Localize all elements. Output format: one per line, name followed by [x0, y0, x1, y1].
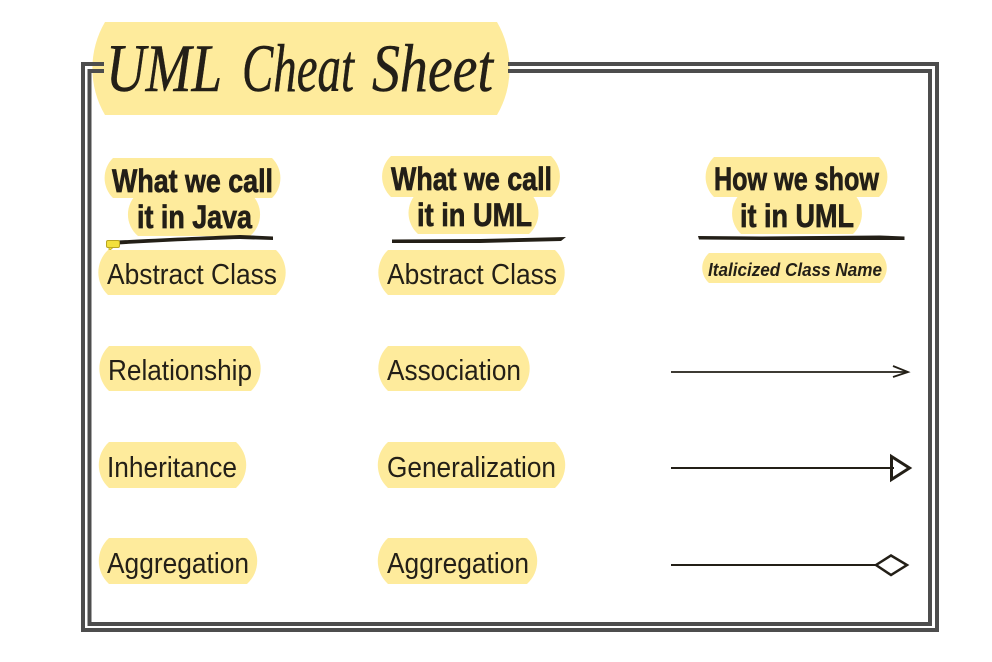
column heading: What we call it in UML: it in UML [417, 197, 532, 233]
icon: comment marker [106, 240, 120, 251]
column heading: How we show it in UML [706, 157, 887, 234]
title pill background [92, 22, 510, 115]
column heading: What we call it in Java: What we call [112, 163, 273, 199]
column heading: What we call it in UML: What we call [391, 161, 552, 197]
row 4 java: Aggregation: Aggregation [107, 548, 249, 580]
row 1 uml: Abstract Class: Abstract Class [387, 259, 557, 291]
row 3 java: Inheritance [99, 442, 246, 488]
column heading: What we call it in Java [105, 158, 280, 236]
title: Sheet [372, 30, 495, 106]
title: Cheat [242, 30, 355, 106]
row 3 uml: Generalization: Generalization [387, 452, 556, 484]
row 4 java: Aggregation [99, 538, 257, 584]
row 2 java: Relationship: Relationship [108, 355, 252, 387]
row 1 notation: Italicized Class Name [702, 253, 887, 283]
arrow: association [671, 366, 908, 377]
double frame [83, 64, 937, 630]
column heading: What we call it in Java: it in Java [137, 199, 252, 235]
row 1 java: Abstract Class [98, 250, 286, 295]
arrow: generalization [671, 456, 910, 480]
row 4 uml: Aggregation [378, 538, 537, 584]
row 2 uml: Association [378, 346, 530, 391]
underline: Java column [108, 235, 273, 245]
row 2 java: Relationship [99, 346, 261, 391]
arrow: aggregation [671, 556, 907, 575]
title [106, 30, 495, 106]
underline: notation column [698, 236, 904, 240]
column heading: How we show it in UML: it in UML [740, 198, 854, 234]
row 2 uml: Association: Association [387, 355, 521, 387]
title: UML [106, 30, 222, 106]
underline: UML column [392, 237, 566, 243]
column heading: How we show it in UML: How we show [714, 161, 879, 197]
row 3 java: Inheritance: Inheritance [107, 452, 237, 484]
column heading: What we call it in UML [382, 156, 560, 234]
row 1 notation: Italicized Class Name: Italicized Class Name [708, 260, 882, 280]
row 1 uml: Abstract Class [378, 250, 565, 295]
row 1 java: Abstract Class: Abstract Class [107, 259, 277, 291]
row 3 uml: Generalization [378, 442, 565, 488]
row 4 uml: Aggregation: Aggregation [387, 548, 529, 580]
